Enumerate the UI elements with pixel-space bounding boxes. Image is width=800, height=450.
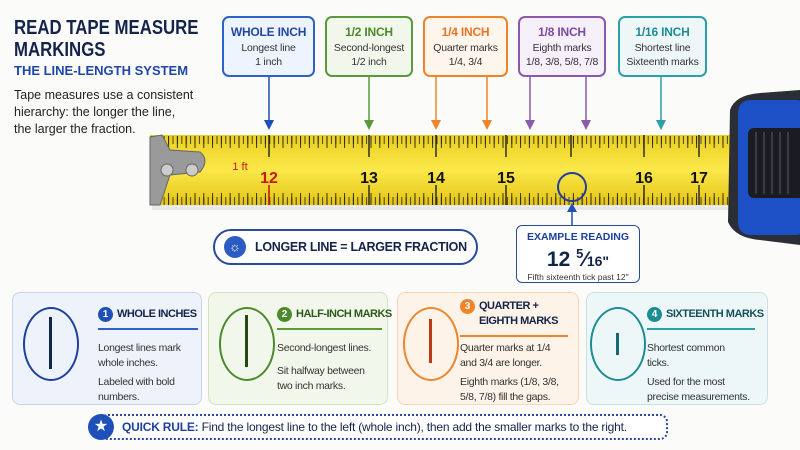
card: whole inches: numbers.	[98, 391, 139, 403]
card: sixteenth: 4	[652, 309, 657, 320]
card: quarter + eighth	[397, 292, 579, 405]
card: half inch: 2	[282, 309, 287, 320]
callout: sixteenth inch: 1/16 INCH	[635, 25, 690, 39]
quick rule: QUICK RULE: Find the longest line to the left (whole inch), then add the smaller marks to the right.	[122, 420, 627, 434]
card: sixteenth: Used for the most	[647, 376, 725, 388]
intro text: the larger the fraction.	[14, 122, 136, 136]
callout: whole inch	[222, 16, 315, 77]
card: quarter + eighth: Quarter marks at 1/4	[460, 342, 550, 354]
card: half inch	[208, 292, 388, 405]
card: quarter + eighth: EIGHTH MARKS	[479, 315, 558, 327]
card: half inch: Sit halfway between	[277, 365, 365, 377]
card: quarter + eighth: 3	[465, 301, 470, 312]
icon: star: ★	[94, 418, 108, 435]
card: quarter + eighth: 5/8, 7/8) fill the gaps.	[460, 391, 550, 403]
callout: quarter inch: 1/4 INCH	[442, 25, 489, 39]
quick rule	[100, 414, 668, 440]
callout: whole inch: Longest line	[241, 42, 296, 54]
subtitle: THE LINE-LENGTH SYSTEM	[14, 63, 188, 78]
numbers: 1 ft	[232, 161, 248, 173]
card: half inch: HALF-INCH MARKS	[296, 308, 392, 320]
callout: half inch: Second-longest	[334, 42, 404, 54]
card: whole inches: Labeled with bold	[98, 376, 175, 388]
callout: half inch: 1/2 inch	[351, 56, 387, 68]
callout: sixteenth inch	[618, 16, 707, 77]
title: MARKINGS	[14, 39, 105, 61]
icon: bulb	[224, 236, 246, 258]
callout: sixteenth inch: Sixteenth marks	[626, 56, 699, 68]
arrows	[264, 77, 666, 225]
numbers: 12	[260, 170, 278, 187]
numbers: 14	[427, 170, 445, 187]
tape case	[728, 90, 800, 245]
card: sixteenth: precise measurements.	[647, 391, 750, 403]
intro text	[14, 88, 194, 136]
pill: longer line: LONGER LINE = LARGER FRACTION	[255, 240, 467, 254]
callout: sixteenth inch: Shortest line	[635, 42, 690, 54]
intro text: Tape measures use a consistent	[14, 88, 193, 102]
numbers: 16	[635, 170, 653, 187]
title	[14, 17, 199, 61]
icon: bulb: ☼	[229, 239, 241, 254]
card: quarter + eighth: QUARTER +	[479, 300, 538, 312]
callout: quarter inch: Quarter marks	[433, 42, 498, 54]
card: whole inches: Longest lines mark	[98, 342, 181, 354]
callout: whole inch: WHOLE INCH	[231, 25, 306, 39]
example reading: EXAMPLE READING	[527, 231, 629, 243]
callout: half inch	[325, 16, 413, 77]
tape measure	[150, 77, 800, 245]
numbers: 15	[497, 170, 515, 187]
card: quarter + eighth: Eighth marks (1/8, 3/8,	[460, 376, 559, 388]
card: half inch: Second-longest lines.	[277, 342, 371, 354]
example reading: 12 5⁄16"	[547, 246, 609, 271]
card: whole inches	[12, 292, 202, 405]
callout: eighth inch	[518, 16, 606, 77]
callout: whole inch: 1 inch	[255, 56, 282, 68]
callout: quarter inch: 1/4, 3/4	[449, 56, 482, 68]
numbers	[232, 161, 708, 187]
card: sixteenth: Shortest common	[647, 342, 725, 354]
icon: star	[88, 414, 114, 440]
tape shadow	[152, 200, 732, 210]
numbers: 13	[360, 170, 378, 187]
tape body	[150, 135, 735, 205]
callout: eighth inch: 1/8 INCH	[538, 25, 586, 39]
example reading	[516, 225, 640, 283]
example circle	[558, 173, 586, 201]
card: quarter + eighth: and 3/4 are longer.	[460, 357, 542, 369]
card: sixteenth: ticks.	[647, 357, 669, 369]
card: sixteenth: SIXTEENTH MARKS	[666, 308, 764, 320]
card: whole inches: WHOLE INCHES	[117, 308, 197, 320]
pill: longer line	[213, 229, 478, 265]
callout: eighth inch: Eighth marks	[533, 42, 591, 54]
intro text: hierarchy: the longer the line,	[14, 105, 175, 119]
card: whole inches: 1	[103, 309, 108, 320]
title: READ TAPE MEASURE	[14, 17, 199, 39]
callout: eighth inch: 1/8, 3/8, 5/8, 7/8	[526, 56, 598, 68]
callout: quarter inch	[423, 16, 508, 77]
card: sixteenth	[586, 292, 768, 405]
metal hook	[150, 135, 205, 205]
card: whole inches: whole inches.	[98, 357, 158, 369]
example reading: Fifth sixteenth tick past 12"	[527, 272, 629, 282]
card: half inch: two inch marks.	[277, 380, 345, 392]
callout: half inch: 1/2 INCH	[345, 25, 393, 39]
numbers: 17	[690, 170, 708, 187]
